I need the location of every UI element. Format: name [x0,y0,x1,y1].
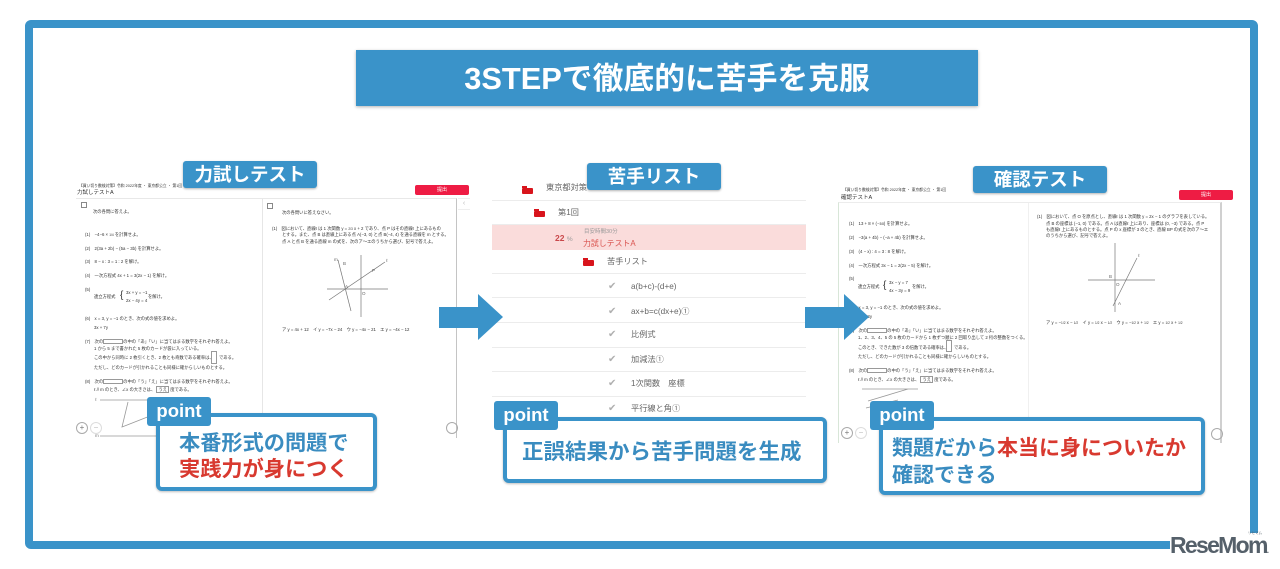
line graph: ℓ [1138,253,1140,258]
right question column: ア y = 4x + 12 イ y = −7x − 24 ウ y = −4x − 21 エ y = −4x − 12 [282,326,409,332]
left question column: (3) (4 − x) : 4 = 3 : 8 を解け。 [849,248,908,254]
callout text: 本番形式の問題で [179,432,349,455]
label: confirmation test [973,166,1107,193]
left question column: (8) 次の の中の「う」「え」に当てはまる数字をそれぞれ答えよ。 [85,378,233,384]
side tab: ‹ [463,200,465,207]
zoom controls: + [80,423,84,432]
submit button [1179,190,1233,200]
check items: ✔ [608,281,616,292]
left question column: 3x + y = −1 [126,290,147,294]
left question column: (5) [849,276,854,280]
score: 22 % [555,233,573,243]
left question column: (1) 13 + 8 × (−3/8) を計算せよ。 [849,220,912,226]
left question column: 4x − 3y = 9 [889,288,910,292]
left question column: この中から同時に 2 枚引くとき、2 枚とも奇数である確率は、 [94,354,214,360]
left question column: である。 [954,344,971,350]
right question column: ア y = −1/2 x − 1/2 イ y = 1/2 x − 1/2 ウ y = −1/2 x + 1/2 エ y = 1/2 x + 1/2 [1046,320,1183,324]
panel: weak point list: ✔ [608,403,616,414]
test name: 力試しテストA [77,190,114,196]
geometry figure [862,388,918,408]
submit button: 提出 [1201,192,1211,198]
point tag [870,401,934,430]
left question column: (2) 2(3a + 2b) − (5a − 3b) を計算せよ。 [85,246,163,250]
line graph: O [1116,282,1120,287]
right question column: も直線ℓ 上にあるものとする。点 P の x 座標が 3 のとき、直線 BP の式を次のア〜エ [1046,226,1208,232]
line graph: B [343,261,346,266]
label: confirmation test: 確認テスト [994,169,1086,190]
left question column: 1、2、3、4、5 の 5 枚のカードから 1 枚ずつ順に 2 回取り出して 2 桁の整数をつくる。 [858,334,1028,340]
right question column: のうちから選び、記号で答えよ。 [1046,232,1110,238]
panel: weak point list: ax+b=c(dx+e)① [631,307,689,316]
point tag: point [503,404,549,425]
panel: weak point list: ✔ [608,354,616,365]
sheet outline [838,202,1222,443]
panel: weak point list: 苦手リスト [607,257,648,266]
callout text: 類題だから本当に身についたか [892,437,1186,460]
confirmation test header: 【買い切り数検対策】令和 2022年度 ・ 東京都公立 ・ 第1回 [843,188,946,192]
right question column: 次の各問いに答えなさい。 [282,210,334,214]
left question column: 2x − 4y = 4 [126,298,147,302]
panel: weak point list: a(b+c)-(d+e) [631,282,677,291]
line graph: A [1118,301,1121,306]
left question column: ただし、どのカードが引かれることも同様に確からしいものとする。 [858,354,991,358]
panel: weak point list [492,183,806,414]
point tag: point [879,404,925,425]
right question column: (1) 図において、直線ℓ は 1 次関数 y = 2/3 x + 2 であり、点 P はその直線ℓ 上にあるもの [272,226,441,230]
left question column: (6) x = 3, y = −1 のとき、次の式の値を求めよ。 [849,304,943,310]
confirmation test name: 確認テストA [841,195,872,201]
line graph [1088,243,1155,312]
point tag [147,397,211,426]
sheet outline [76,198,457,438]
left question column: (7) 次の の中の「あ」「い」に当てはまる数字をそれぞれ答えよ。 [849,328,997,332]
geometry figure [95,397,156,438]
left question column: (4) 一次方程式 3x − 1 = 2(2x − 5) を解け。 [849,262,933,268]
left question column: (7) 次の の中の「あ」「い」に当てはまる数字をそれぞれ答えよ。 [85,338,233,344]
panel: weak point list: 目安時間30分 [584,228,618,234]
left question column: (3) 8 − x : 3 = 1 : 2 を解け。 [85,259,141,264]
line graph: B [1109,274,1112,279]
left question column: (4) 一次方程式 4x + 1 = 3(2x − 1) を解け。 [85,273,169,278]
left question column [849,220,1028,408]
panel: weak point list: 平行線と角① [631,404,680,413]
panel: practice test screenshot [76,183,470,438]
left question column: 1 から 5 まで書かれた 5 枚のカードが袋に入っている。 [94,346,201,350]
left question column: 2x + 3y [858,314,872,318]
panel: weak point list: 第1回 [558,208,579,217]
left question column [81,202,236,438]
arrow: step 2 to 3 [805,294,869,340]
right question column: (1) 図において、点 O を原点とし、直線ℓ は 1 次関数 y = 2x − 1 のグラフを表している。 [1037,214,1209,218]
label: practice test: 力試しテスト [194,164,306,185]
left question column: (2) −3(a + 4b) − (−a + 4b) を計算せよ。 [849,234,928,240]
left question column: (5) [85,286,90,292]
logo: ReseMom: リセマム [1248,531,1262,535]
zoom controls: + [845,428,849,437]
left question column: ただし、どのカードが引かれることも同様に確からしいものとする。 [94,364,227,370]
left question column: { [120,290,123,301]
label: practice test [183,161,317,188]
point tag [494,401,558,430]
callout text [503,417,827,483]
callout text: 実践力が身につく [179,458,349,481]
label: weak list [587,163,721,190]
line graph: P [372,268,375,273]
line graph: m [334,257,338,262]
left question column: 連立方程式 [94,294,115,298]
point tag: point [156,400,202,421]
right question column: 点 B の座標は (−1, 0) である。点 A は直線ℓ 上にあり、座標は (0, −3) である。点 P [1046,220,1204,226]
panel: weak point list: ✔ [608,306,616,317]
callout text: 確認できる [892,464,997,487]
line graph: ℓ [386,258,388,263]
panel: weak point list: 力試しテストA [583,239,636,248]
right question column [267,203,449,332]
side tab [458,198,470,210]
left question column: (6) x = 3, y = −1 のとき、次の式の値を求めよ。 [85,316,179,320]
submit button: 提出 [437,187,447,193]
panel: weak point list: 1次関数 座標 [631,379,685,388]
callout text [879,417,1205,495]
folder icons [522,188,533,194]
line graph: A [345,284,348,289]
left question column: 連立方程式 [858,284,879,288]
zoom controls [841,427,853,439]
left question column: 次の各問に答えよ。 [93,208,132,214]
geometry figure: ℓ [95,397,97,402]
right question column: とする。また、点 B は直線上にある点 A(−3, 0) と点 B(−4, 4) を通る直線を m とする。 [282,232,449,236]
line graph [327,255,388,317]
left question column: ℓ // m のとき、∠x の大きさは、 うえ 度である。 [858,376,956,382]
line graph: O [362,291,366,296]
panel: weak point list: 比例式 [631,330,656,339]
left question column: 3x − y = 7 [889,280,908,284]
callout text: 正誤結果から苦手問題を生成 [522,440,802,464]
callout: point 3 [870,401,1206,497]
left question column: 3x + 7y [94,324,108,330]
zoom controls [76,422,88,434]
title: 3STEPで徹底的に苦手を克服 [464,61,870,96]
panel: weak point list: ✔ [608,378,616,389]
panel: practice test screenshot: − [94,423,98,432]
callout: point 1 [147,397,378,493]
left question column: を解け。 [912,284,929,288]
label: weak list: 苦手リスト [608,166,700,187]
title [356,50,978,106]
list rows [492,175,806,201]
callout: point 2 [494,401,828,485]
test header: 【買い切り数検対策】令和 2022年度 ・ 東京都公立 ・ 第1回 [79,184,182,188]
left question column: このとき、できた数が 3 の倍数である確率は、 [858,344,948,350]
left question column: (1) −4−6 × 1/4 を計算せよ。 [85,232,141,236]
left question column: (8) 次の の中の「う」「え」に当てはまる数字をそれぞれ答えよ。 [849,368,997,372]
submit button [415,185,469,195]
left question column: である。 [219,354,236,360]
right question column: 点 A と点 B を通る直線 m の式を、次のア〜エのうちから選び、記号で答えよ。 [282,238,436,244]
logo: ReseMom: ReseMom. [1170,532,1267,558]
right question column [1037,214,1209,325]
panel: confirmation test screenshot [838,187,1233,443]
callout text [156,413,377,491]
arrow: step 1 to 2 [439,294,503,340]
panel: weak point list: 加減法① [631,355,664,364]
panel: confirmation test screenshot: − [859,428,863,437]
panel: weak point list: ✔ [608,329,616,340]
left question column: ℓ // m のとき、∠x の大きさは、 うえ 度である。 [94,386,192,392]
geometry figure: m [95,433,99,438]
left question column: { [883,280,886,291]
list labels: 東京都対策 [546,183,587,192]
left question column: を解け。 [148,294,165,298]
